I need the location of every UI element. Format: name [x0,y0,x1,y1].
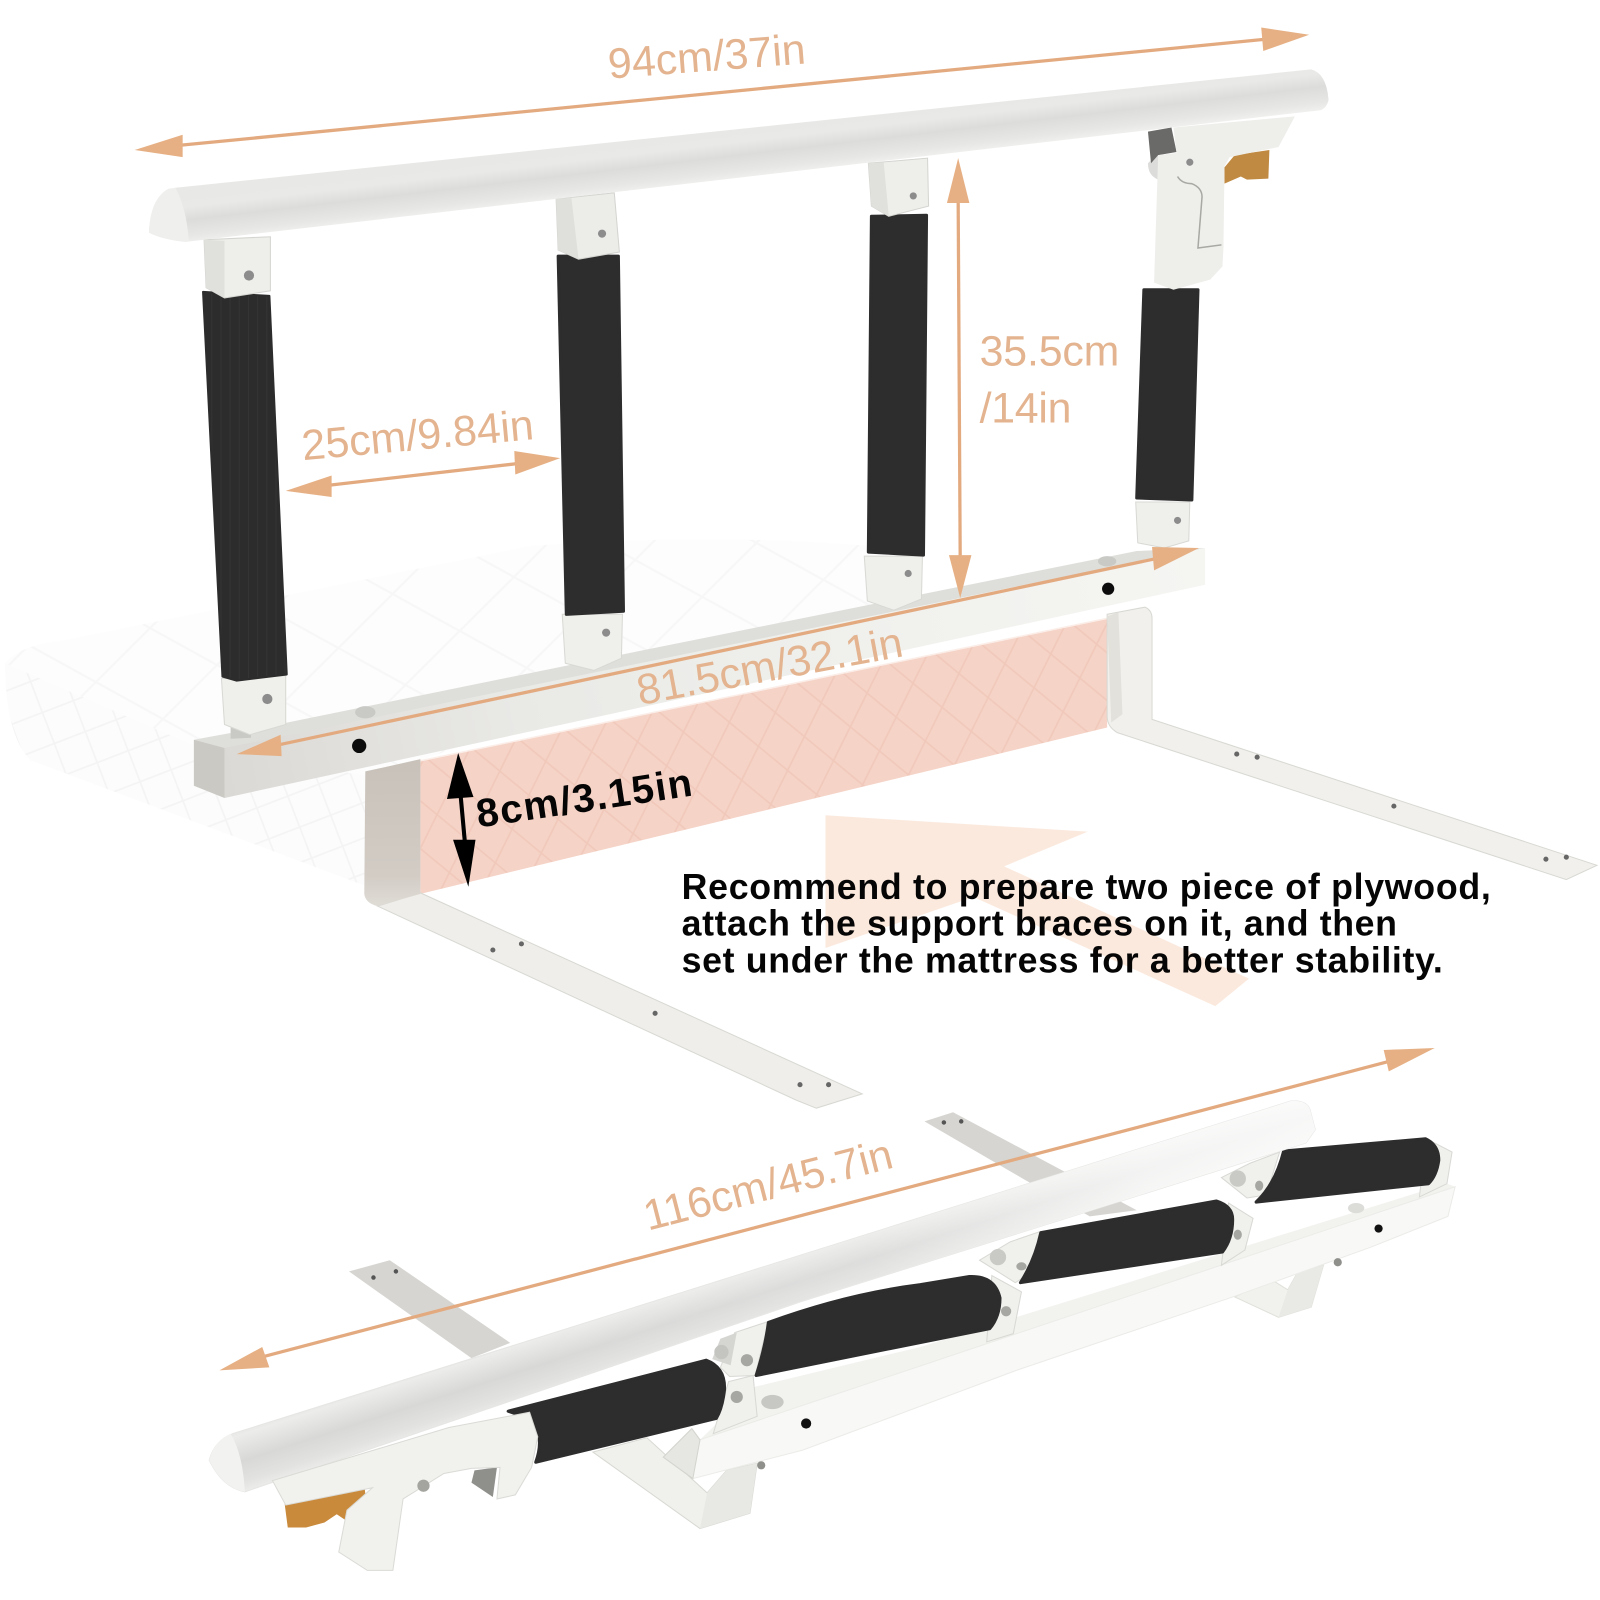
folded rail: U bracket right [1235,1265,1323,1317]
label: /14in: /14in [980,384,1071,432]
folded rail: hinge at grips 3 and 4 [1221,1139,1452,1265]
label: 81.5cm/32.1in: 81.5cm/32.1in [633,619,906,715]
folded rail: front strap [349,1260,510,1358]
bottom crossbar [194,548,1205,798]
folded rail: U bracket left [593,1438,757,1529]
pink mattress end panel [413,618,1107,894]
left support brace [364,759,862,1108]
arrow: 94cm width [135,28,1309,157]
folded rail: foam grip 1 [508,1360,725,1462]
label: 35.5cm: 35.5cm [980,327,1119,375]
arrow: 25cm spacing [286,451,560,497]
note text: attach the support braces on it, and then [682,904,1397,944]
folded rail: foam grip 2 [756,1276,1000,1376]
folded rail: foam grip 3 [1020,1201,1233,1283]
label: 25cm/9.84in: 25cm/9.84in [300,401,536,470]
large pale arrow behind note [826,815,1249,1006]
folding latch, top [1148,116,1295,290]
arrow: 8cm height [447,753,476,887]
folded rail: hinge at grips 1 and 2 [712,1321,768,1434]
arrow: 81.5cm width [237,547,1199,756]
top handrail [149,69,1329,242]
post 3 [864,158,929,610]
folded rail: rear strap [924,1112,1137,1216]
folded rail: handrail tube [209,1101,1315,1492]
post 2 [556,193,623,670]
arrow: 35.5cm height [947,158,971,598]
note text: Recommend to prepare two piece of plywood, [682,867,1491,907]
post 4 [1136,290,1198,548]
folded rail: folding latch [272,1412,538,1570]
right support brace [1107,607,1597,880]
mattress [5,539,923,886]
note text: set under the mattress for a better stability. [682,940,1443,980]
post 1 [203,237,287,735]
folded rail: base bar [663,1184,1455,1479]
label: 8cm/3.15in: 8cm/3.15in [473,761,695,836]
label: 94cm/37in: 94cm/37in [606,25,807,89]
folded rail: hinge at grips 2 and 3 [980,1232,1040,1342]
note text [682,867,1491,980]
arrow: 116cm folded length [219,1048,1435,1370]
label: 116cm/45.7in: 116cm/45.7in [639,1130,898,1240]
folded rail: orange latch handle [285,1486,367,1528]
folded rail: foam grip 4 [1256,1139,1439,1202]
